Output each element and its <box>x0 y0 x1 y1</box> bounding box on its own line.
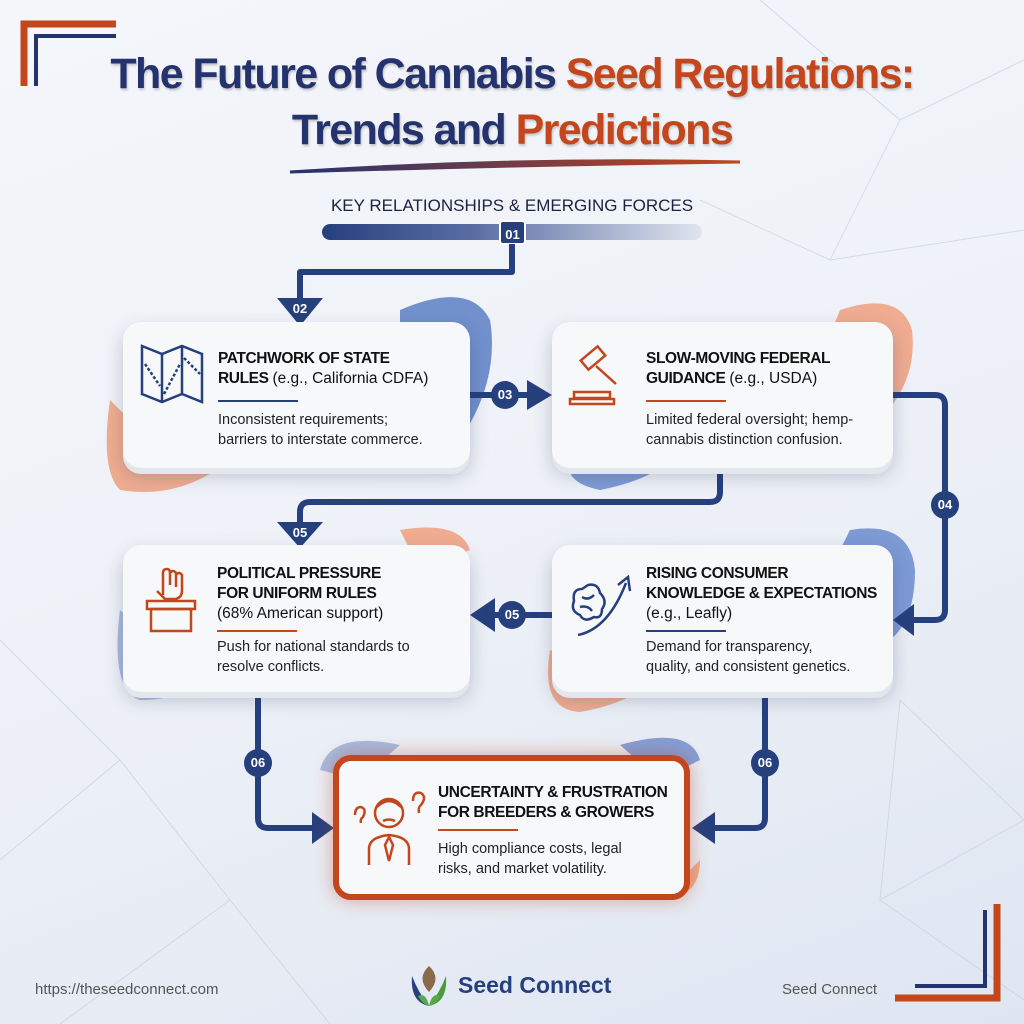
badge 03: 03 <box>498 387 512 402</box>
step 01 badge <box>499 220 526 245</box>
icon: map <box>140 344 204 404</box>
card: uncertainty & frustration: High compliance costs, legal <box>438 841 622 857</box>
card: slow-moving federal guidance: SLOW-MOVING FEDERAL <box>646 350 830 367</box>
corner bracket bottom-right <box>895 904 1000 1002</box>
card: uncertainty & frustration: FOR BREEDERS & GROWERS <box>438 804 654 821</box>
subtitle: KEY RELATIONSHIPS & EMERGING FORCES <box>331 196 693 215</box>
card: political pressure <box>123 545 470 692</box>
badge 05: 05 <box>505 607 519 622</box>
card: political pressure: (68% American support) <box>217 605 383 622</box>
card: patchwork of state rules <box>123 322 470 468</box>
card: slow-moving federal guidance: Limited federal oversight; hemp- <box>646 412 853 428</box>
card: patchwork of state rules: PATCHWORK OF STATE <box>218 350 390 367</box>
card: rising consumer knowledge <box>552 545 893 692</box>
footer logo <box>412 966 612 1006</box>
card: political pressure: resolve conflicts. <box>217 659 324 675</box>
badge 06 left: 06 <box>251 755 265 770</box>
icon: gavel <box>568 344 617 406</box>
card: uncertainty & frustration <box>333 755 690 900</box>
icon: brain with arrow <box>572 574 632 636</box>
badge 04: 04 <box>938 497 952 512</box>
connectors: 05 <box>293 525 307 540</box>
card: slow-moving federal guidance <box>552 322 893 468</box>
badge 04 <box>931 491 959 519</box>
card: political pressure: Push for national standards to <box>217 639 410 655</box>
card: slow-moving federal guidance: cannabis distinction confusion. <box>646 432 843 448</box>
corner bracket top-left <box>20 20 116 86</box>
footer logo: Seed Connect <box>458 972 611 998</box>
card: political pressure: FOR UNIFORM RULES <box>217 585 376 602</box>
card: rising consumer knowledge: (e.g., Leafly) <box>646 605 732 622</box>
card: rising consumer knowledge: KNOWLEDGE & EXPECTATIONS <box>646 585 877 602</box>
title: The Future of Cannabis Seed Regulations: <box>110 50 914 98</box>
badge 06 left <box>244 749 272 777</box>
badge 06 right <box>751 749 779 777</box>
card: patchwork of state rules: Inconsistent requirements; <box>218 412 388 428</box>
card: rising consumer knowledge: Demand for transparency, <box>646 639 813 655</box>
badge 03 <box>491 381 519 409</box>
card: uncertainty & frustration: risks, and market volatility. <box>438 861 607 877</box>
step 01 badge: 01 <box>505 227 520 242</box>
footer url: https://theseedconnect.com <box>35 981 218 998</box>
card: uncertainty & frustration: UNCERTAINTY & FRUSTRATION <box>438 784 667 801</box>
card: rising consumer knowledge: RISING CONSUMER <box>646 565 788 582</box>
card: slow-moving federal guidance: GUIDANCE (e.g., USDA) <box>646 370 817 387</box>
card: patchwork of state rules: RULES (e.g., California CDFA) <box>218 370 428 387</box>
connectors: 02 <box>293 301 307 316</box>
footer brand text: Seed Connect <box>782 981 877 998</box>
icon: ballot box <box>146 568 196 632</box>
icon: confused person <box>354 791 426 865</box>
card: rising consumer knowledge: quality, and consistent genetics. <box>646 659 850 675</box>
card: patchwork of state rules: barriers to interstate commerce. <box>218 432 423 448</box>
badge 06 right: 06 <box>758 755 772 770</box>
card: political pressure: POLITICAL PRESSURE <box>217 565 381 582</box>
title underline swoosh <box>290 159 740 174</box>
subtitle bar <box>322 224 702 240</box>
title: Trends and Predictions <box>292 106 732 154</box>
badge 05 <box>498 601 526 629</box>
title <box>110 50 914 154</box>
